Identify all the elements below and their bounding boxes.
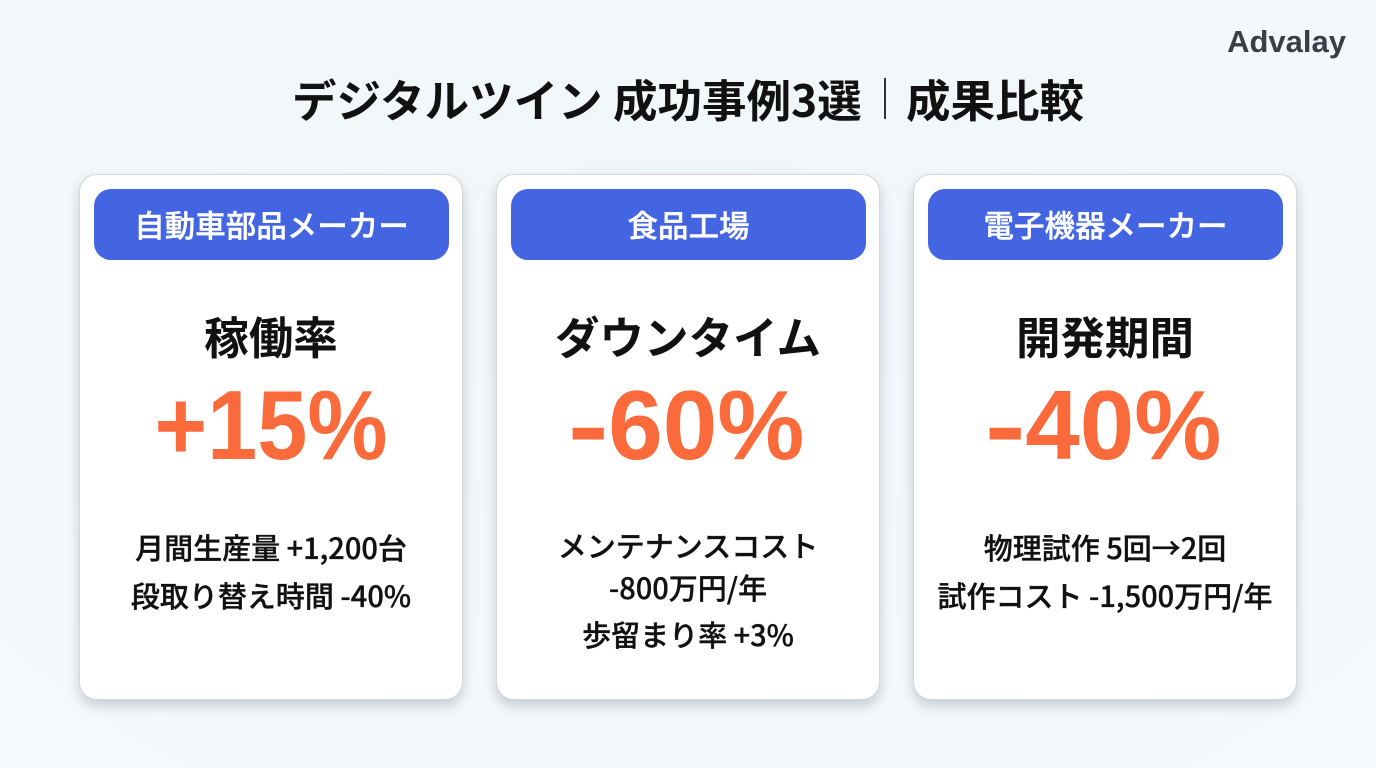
title (292, 65, 1084, 130)
metric value: +15% (154, 370, 388, 480)
header: electronics maker: 電子機器メーカー (984, 202, 1228, 246)
detail: monthly production: 月間生産量 +1,200台 (135, 526, 407, 568)
detail: physical prototypes: 物理試作 5回→2回 (984, 526, 1226, 568)
title: 成功事例3選 (613, 65, 862, 130)
metric name: 開発期間 (1016, 302, 1194, 367)
title: 成果比較 (906, 65, 1084, 130)
header: automotive parts maker (94, 189, 449, 260)
metric value: 60% (608, 370, 804, 480)
header: automotive parts maker: 自動車部品メーカー (134, 202, 409, 246)
metric name: 稼働率 (204, 302, 338, 367)
metric value: - (985, 370, 1025, 480)
brand logo: Advalay (1227, 24, 1346, 59)
header: food factory (511, 189, 866, 260)
detail: yield: 歩留まり率 +3% (582, 613, 794, 655)
detail: prototype cost: 試作コスト -1,500万円/年 (938, 574, 1272, 616)
panel: electronics maker (913, 174, 1297, 700)
header: electronics maker (928, 189, 1283, 260)
detail: maintenance cost: メンテナンスコスト (558, 524, 818, 566)
metric name: ダウンタイム (555, 302, 821, 367)
metric value: 40% (1025, 370, 1221, 480)
detail: cost amount: -800万円/年 (609, 566, 767, 608)
panel: food factory (496, 174, 880, 700)
title: デジタルツイン (292, 65, 603, 130)
header: food factory: 食品工場 (628, 202, 750, 246)
detail: changeover time: 段取り替え時間 -40% (131, 574, 411, 616)
panel: automotive parts maker (79, 174, 463, 700)
metric value: - (568, 370, 608, 480)
